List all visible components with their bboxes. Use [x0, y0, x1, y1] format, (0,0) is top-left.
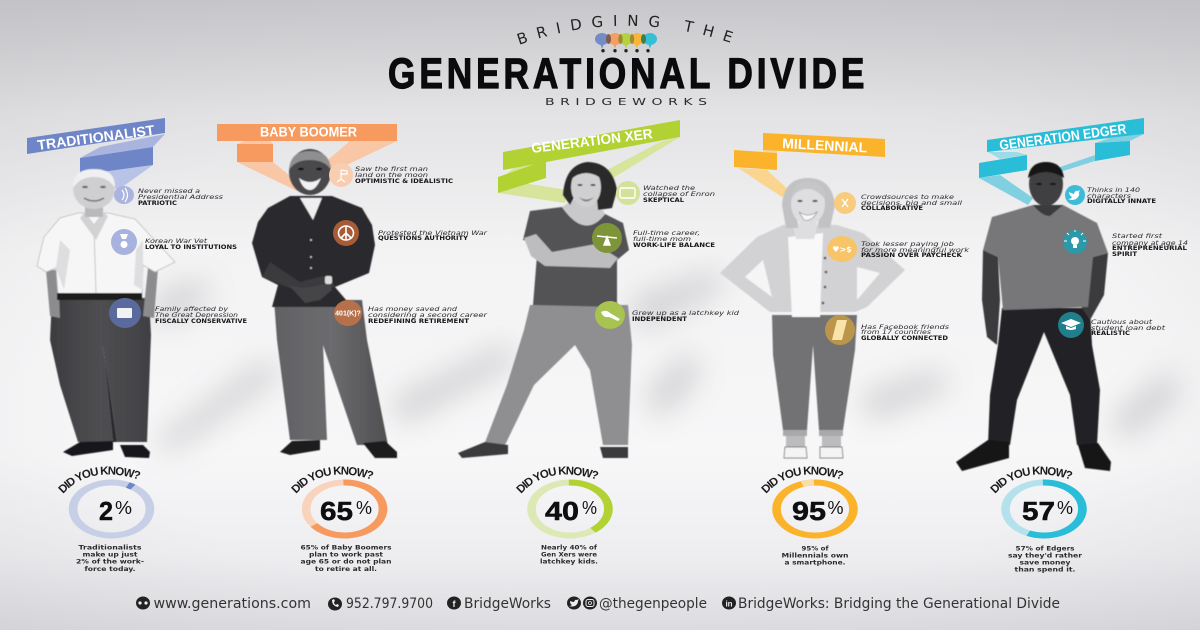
figure: millennial woman — [720, 178, 905, 458]
callout: loyal to institutions: LOYAL TO INSTITUTIONS — [145, 244, 237, 251]
callout: skeptical: SKEPTICAL — [643, 197, 684, 204]
callout: collaborative: decisions, big and small — [861, 199, 962, 207]
did you know: 95 percent: DID YOU KNOW? — [761, 466, 844, 494]
callout: globally connected: Has Facebook friends — [861, 323, 950, 331]
callout: redefining retirement: REDEFINING RETIREMENT — [368, 318, 470, 325]
icon: website — [136, 596, 150, 610]
phone number: 952.797.9700 — [346, 596, 433, 612]
callout: passion over paycheck: ♥>$ — [832, 245, 852, 254]
heading: bridging the: BRIDGING THE — [517, 14, 734, 44]
callout: globally connected: from 17 countries — [861, 328, 932, 336]
callout: globally connected — [825, 315, 950, 345]
callout: collaborative: COLLABORATIVE — [861, 205, 923, 212]
did you know: 65 percent: 65 — [320, 496, 353, 526]
panel: generation xer — [458, 120, 740, 566]
did you know: 57 percent: than spend it. — [1014, 566, 1076, 574]
callout: patriotic: PATRIOTIC — [138, 200, 178, 207]
callout: digitally innate: DIGITALLY INNATE — [1087, 198, 1156, 205]
did you know: 2 percent: 2% of the work- — [76, 558, 145, 566]
did you know: 57 percent — [990, 466, 1087, 574]
callout: optimistic and idealistic: land on the moon — [355, 171, 428, 179]
icon: linkedin — [722, 596, 736, 610]
callout: redefining retirement: 401(K)? — [335, 310, 361, 318]
footer: contact bar — [136, 596, 1060, 612]
banner: generation xer — [498, 120, 680, 203]
banner: millennial: MILLENNIAL — [782, 135, 868, 155]
did you know: 2 percent: force today. — [84, 566, 136, 573]
callout: loyal to institutions: Korean War Vet — [145, 237, 208, 245]
callout: passion over paycheck: PASSION OVER PAYCHECK — [861, 252, 962, 259]
figure: baby boomer man — [252, 149, 397, 458]
did you know: 2 percent: DID YOU KNOW? — [58, 466, 140, 494]
did you know: 57 percent: DID YOU KNOW? — [990, 466, 1072, 494]
social handle: @thegenpeople — [599, 596, 707, 612]
panel: millennial — [720, 133, 970, 566]
did you know: 95 percent: 95% of — [802, 546, 829, 552]
brand name: BRIDGEWORKS — [545, 96, 707, 107]
did you know: 40 percent: Gen Xers were — [541, 552, 597, 558]
did you know: 57 percent: 57 — [1022, 496, 1055, 526]
callout: realistic: REALISTIC — [1091, 330, 1131, 337]
facebook name: BridgeWorks — [464, 596, 551, 612]
panel: generation edger — [956, 118, 1188, 574]
main title: GENERATIONAL DIVIDE — [388, 50, 864, 98]
callout: entrepreneurial spirit: SPIRIT — [1112, 251, 1138, 258]
callout: fiscally conservative — [109, 298, 247, 328]
did you know: 95 percent: % — [828, 498, 844, 518]
callout: patriotic — [114, 186, 224, 207]
figure: traditionalist man — [37, 169, 175, 458]
callout: independent — [595, 301, 740, 329]
banner: baby boomer: BABY BOOMER — [260, 124, 357, 140]
did you know: 95 percent: Millennials own — [782, 552, 848, 560]
did you know: 95 percent: 95 — [792, 496, 826, 526]
did you know: 65 percent: DID YOU KNOW? — [291, 466, 374, 494]
callout: work-life balance: Full-time career, — [633, 229, 700, 237]
banner: baby boomer — [217, 124, 397, 191]
icon: speech bubbles logo — [595, 33, 657, 52]
callout: entrepreneurial spirit: ENTREPRENEURIAL — [1112, 245, 1187, 252]
did you know: 40 percent: latchkey kids. — [540, 558, 598, 566]
icon: facebook: f — [452, 599, 456, 609]
callout: entrepreneurial spirit: company at age 14 — [1112, 239, 1188, 247]
banner: generation xer: GENERATION XER — [530, 125, 653, 156]
did you know: 40 percent — [516, 466, 613, 566]
panel: baby boomer — [217, 124, 488, 573]
icon: instagram — [583, 596, 597, 610]
callout: digitally innate: Thinks in 140 — [1087, 186, 1140, 194]
did you know: 57 percent: save money — [1020, 560, 1070, 566]
did you know: 2 percent: 2 — [99, 496, 113, 526]
callout: realistic — [1058, 312, 1166, 338]
did you know: 57 percent: 57% of Edgers — [1016, 546, 1075, 552]
callout: patriotic: Never missed a — [138, 187, 200, 195]
callout: redefining retirement: considering a second career — [368, 311, 487, 319]
banner: generation edger: GENERATION EDGER — [998, 120, 1127, 153]
did you know: 40 percent: 40 — [545, 496, 579, 526]
icon: facebook — [447, 596, 461, 610]
callout: optimistic and idealistic: OPTIMISTIC & IDEALISTIC — [355, 178, 454, 185]
callout: digitally innate: characters — [1087, 192, 1132, 200]
callout: passion over paycheck: for more meaningful work — [861, 246, 969, 254]
banner: generation edger — [979, 118, 1144, 205]
callout: globally connected: GLOBALLY CONNECTED — [861, 335, 948, 342]
did you know: 2 percent: % — [115, 498, 132, 518]
did you know: 40 percent: DID YOU KNOW? — [516, 466, 598, 494]
did you know: 57 percent: say they'd rather — [1008, 552, 1083, 560]
did you know: 95 percent: a smartphone. — [784, 560, 846, 566]
did you know: 2 percent: make up just — [82, 552, 138, 558]
did you know: 65 percent: age 65 or do not plan — [300, 558, 392, 566]
callout: entrepreneurial spirit: Started first — [1112, 232, 1163, 240]
callout: passion over paycheck — [827, 236, 969, 262]
callout: collaborative — [834, 192, 962, 214]
icon: twitter — [567, 596, 581, 610]
callout: digitally innate — [1065, 185, 1156, 205]
callout: entrepreneurial spirit — [1063, 230, 1188, 258]
callout: patriotic: Presidential Address — [138, 193, 224, 201]
callout: fiscally conservative: FISCALLY CONSERVATIVE — [155, 318, 247, 325]
icon: phone — [328, 598, 342, 610]
banner: traditionalist — [27, 118, 165, 190]
callout: collaborative: Crowdsources to make — [861, 193, 954, 201]
callout: questions authority — [333, 220, 487, 246]
callout: independent: Grew up as a latchkey kid — [632, 309, 740, 317]
did you know: 65 percent: 65% of Baby Boomers — [300, 544, 392, 552]
callout: work-life balance — [592, 223, 715, 253]
did you know: 40 percent: % — [582, 498, 597, 518]
banner: traditionalist: TRADITIONALIST — [36, 122, 156, 153]
callout: realistic: Cautious about — [1091, 318, 1153, 326]
callout: questions authority: QUESTIONS AUTHORITY — [378, 235, 469, 242]
did you know: 65 percent: % — [356, 498, 372, 518]
callout: work-life balance: WORK-LIFE BALANCE — [633, 242, 715, 249]
callout: skeptical: collapse of Enron — [643, 190, 715, 198]
callout: skeptical: Watched the — [643, 184, 695, 192]
callout: realistic: student loan debt — [1091, 324, 1166, 332]
callout: questions authority: Protested the Vietnam War — [378, 229, 487, 237]
callout: independent: INDEPENDENT — [632, 316, 688, 323]
figure: generation edger man — [956, 162, 1111, 471]
callout: fiscally conservative: The Great Depression — [155, 311, 238, 319]
figure: generation xer woman — [458, 162, 632, 458]
callout: redefining retirement: Has money saved and — [368, 305, 458, 313]
callout: fiscally conservative: Family affected by — [155, 305, 228, 313]
callout: optimistic and idealistic: Saw the first man — [355, 165, 428, 173]
banner: millennial — [734, 133, 885, 197]
panel: traditionalist — [27, 118, 247, 573]
did you know: 65 percent: plan to work past — [309, 552, 383, 558]
did you know: 95 percent — [761, 466, 858, 566]
did you know: 65 percent: to retire at all. — [315, 566, 377, 573]
did you know: 2 percent — [58, 466, 154, 573]
did you know: 40 percent: Nearly 40% of — [541, 544, 597, 552]
did you know: 57 percent: % — [1057, 498, 1073, 518]
callout: redefining retirement — [334, 300, 487, 326]
linkedin group: BridgeWorks: Bridging the Generational Divide — [738, 596, 1060, 612]
did you know: 2 percent: Traditionalists — [78, 544, 142, 552]
callout: passion over paycheck: Took lesser paying job — [861, 240, 954, 248]
did you know: 65 percent — [291, 466, 392, 573]
title block — [388, 14, 864, 107]
callout: optimistic and idealistic — [329, 163, 454, 187]
callout: loyal to institutions — [111, 229, 237, 255]
callout: work-life balance: full-time mom — [633, 235, 691, 243]
icon: linkedin: in — [725, 600, 733, 608]
website: www.generations.com — [154, 596, 311, 612]
callout: skeptical — [616, 181, 715, 205]
